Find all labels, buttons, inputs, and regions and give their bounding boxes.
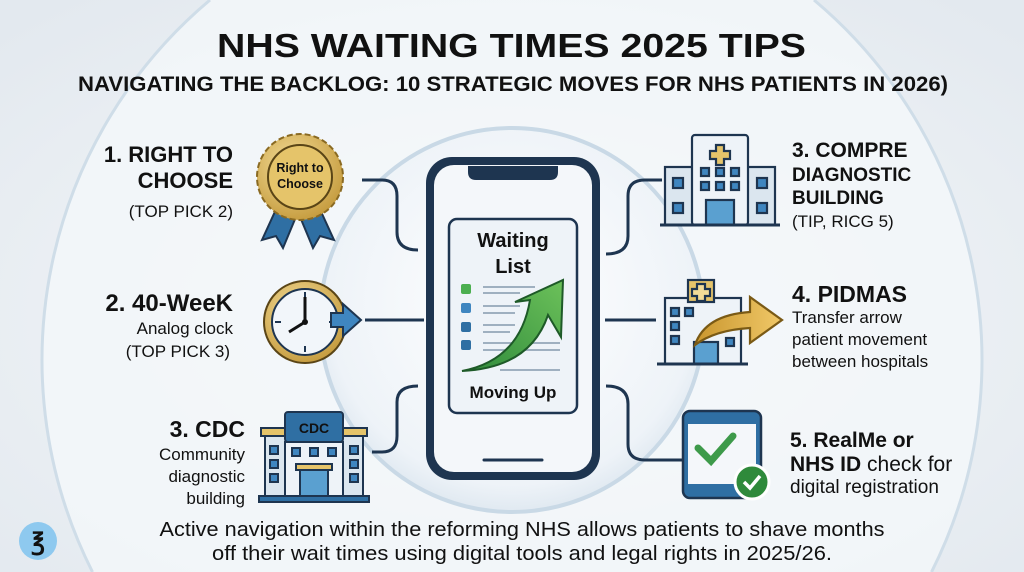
item right 2 text: patient movement xyxy=(792,330,927,349)
phone screen card: Waiting xyxy=(477,230,549,252)
footer text: off their wait times using digital tools and legal rights in 2025/26. xyxy=(212,543,832,565)
item 3: CDC text: diagnostic xyxy=(168,467,245,486)
icon: hospital xyxy=(660,135,780,225)
item 3: CDC text xyxy=(159,416,245,508)
item right 2 text: Transfer arrow xyxy=(792,308,903,327)
icon: medal: Right to xyxy=(276,161,324,175)
item 1: right to choose text: 1. RIGHT TO xyxy=(104,142,233,167)
item 3: CDC text: 3. CDC xyxy=(170,416,245,442)
item 1: right to choose text xyxy=(104,142,233,221)
icon: medal: Choose xyxy=(277,177,323,191)
item right 1 text xyxy=(792,139,912,231)
connectors xyxy=(362,180,682,460)
footer text xyxy=(160,519,884,565)
icon: clock xyxy=(264,281,361,363)
item 2: 40-week text: 2. 40-WeeK xyxy=(105,290,234,317)
item right 2 text: 4. PIDMAS xyxy=(792,281,907,307)
item 1: right to choose text: (TOP PICK 2) xyxy=(129,202,233,221)
item right 3 text: NHS ID check for xyxy=(790,453,952,476)
icon: hospital with transfer arrow xyxy=(657,280,782,364)
item right 1 text: DIAGNOSTIC xyxy=(792,165,912,186)
phone screen card: Moving Up xyxy=(470,383,556,402)
icon: tablet with check xyxy=(683,411,769,499)
item 2: 40-week text: (TOP PICK 3) xyxy=(126,342,230,361)
item 3: CDC text: Community xyxy=(159,445,245,464)
icon: green arrow xyxy=(462,280,563,371)
footer text: Active navigation within the reforming NHS allows patients to shave months xyxy=(160,519,884,541)
item right 1 text: BUILDING xyxy=(792,188,884,209)
phone screen card xyxy=(449,219,577,413)
icon: medal xyxy=(257,134,343,248)
item right 2 text: between hospitals xyxy=(792,352,928,371)
item right 1 text: 3. COMPRE xyxy=(792,139,908,162)
item 2: 40-week text xyxy=(105,290,234,361)
item 3: CDC text: building xyxy=(186,489,245,508)
item right 1 text: (TIP, RICG 5) xyxy=(792,212,894,231)
icon: CDC building: CDC xyxy=(299,420,329,436)
icon: logo xyxy=(19,522,57,560)
phone screen card: List xyxy=(495,256,531,278)
subtitle: NAVIGATING THE BACKLOG: 10 STRATEGIC MOVES FOR NHS PATIENTS IN 2026) xyxy=(78,73,948,96)
item right 2 text xyxy=(792,281,928,371)
item 1: right to choose text: CHOOSE xyxy=(138,168,233,193)
phone xyxy=(426,157,600,480)
item right 3 text xyxy=(790,429,952,498)
icon: CDC building xyxy=(259,412,369,502)
item right 3 text: 5. RealMe or xyxy=(790,429,914,452)
title: NHS WAITING TIMES 2025 TIPS xyxy=(217,27,806,64)
item 2: 40-week text: Analog clock xyxy=(137,319,233,338)
item right 3 text: digital registration xyxy=(790,477,939,498)
icon: logo: ℥ xyxy=(31,529,45,556)
